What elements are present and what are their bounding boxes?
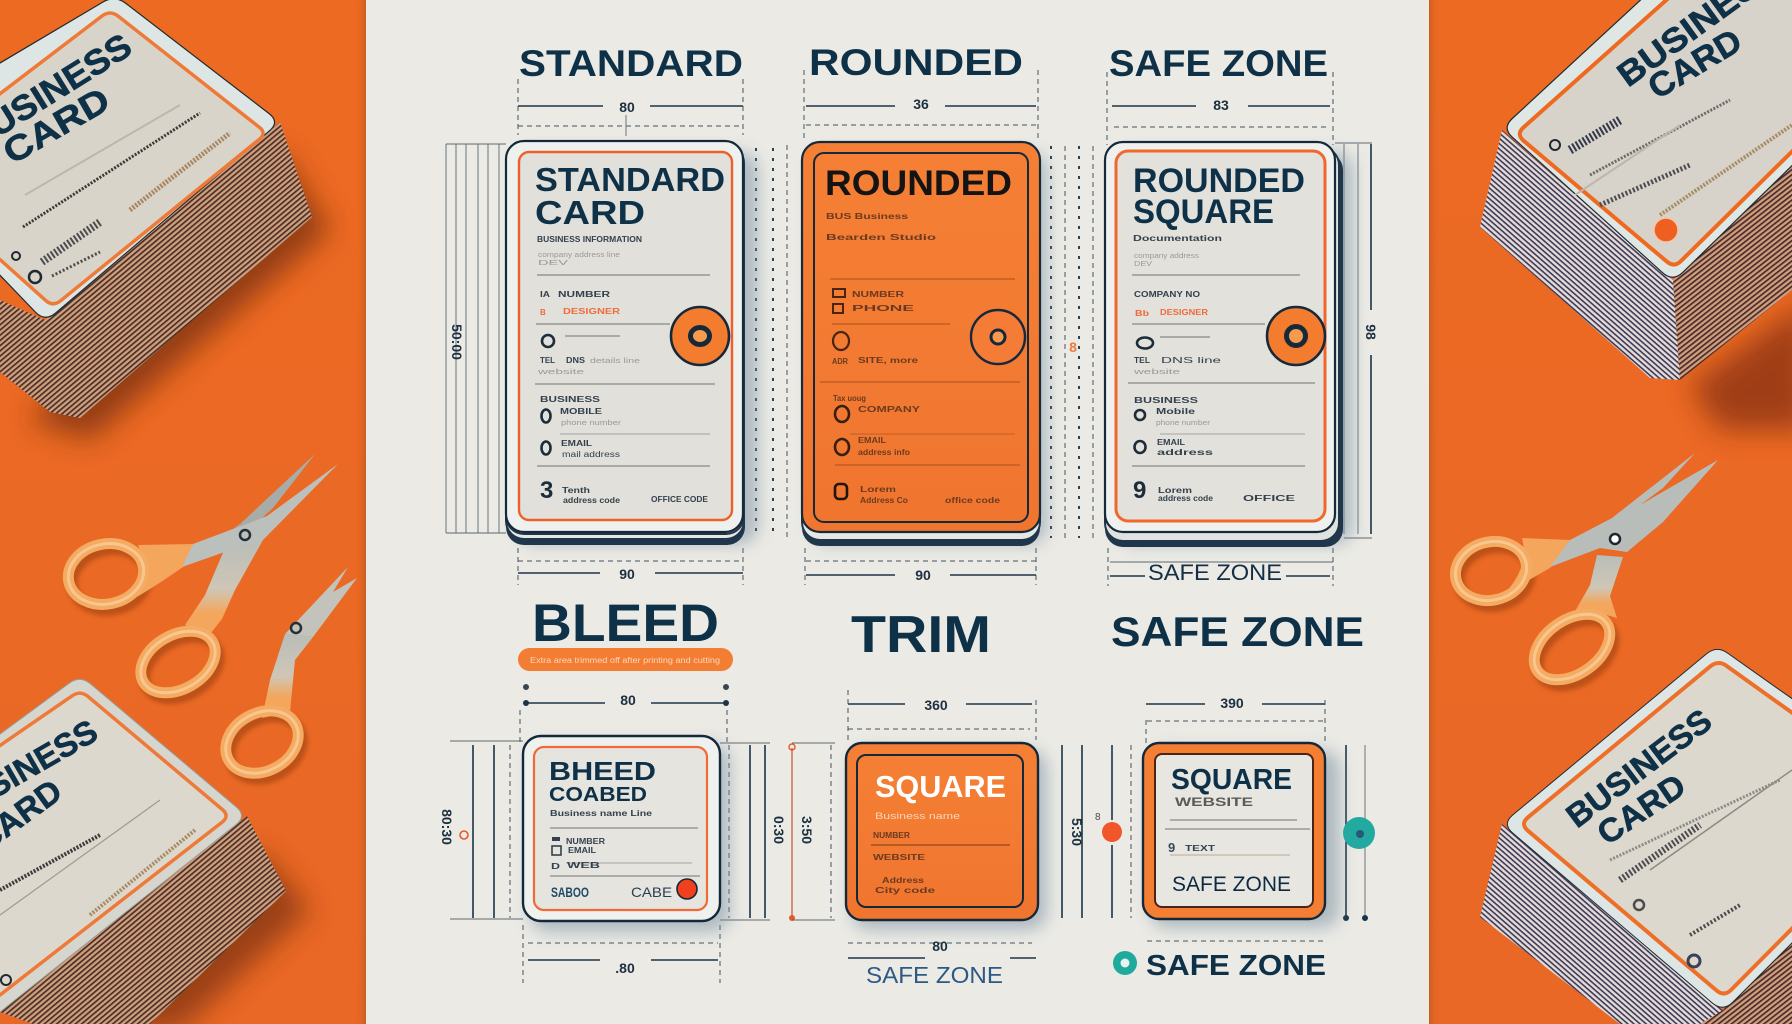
contact rows: DEV bbox=[1134, 261, 1152, 268]
dimensions: bleed card: 80:30 bbox=[439, 809, 455, 845]
contact rows: Lorem bbox=[860, 485, 896, 494]
contact rows: D bbox=[551, 862, 560, 871]
contact rows: EMAIL bbox=[1157, 438, 1185, 447]
contact rows: PHONE bbox=[852, 304, 915, 313]
contact rows: DNS bbox=[566, 356, 586, 365]
heading: trim: TRIM bbox=[851, 606, 991, 664]
dimensions: safe zone card: 83 bbox=[1213, 97, 1229, 113]
contact rows: Mobile bbox=[1156, 407, 1196, 416]
legend: safe zone: SAFE ZONE bbox=[1146, 950, 1326, 982]
card: rounded square bbox=[1105, 142, 1353, 547]
right decoration: business card stack top: CARD bbox=[1642, 22, 1749, 107]
contact rows: DNS line bbox=[1161, 356, 1222, 365]
contact rows: company address line bbox=[538, 252, 620, 259]
dimensions: standard card: 90 bbox=[619, 566, 635, 582]
panel: guide sheet bbox=[365, 0, 1430, 1024]
card title: STANDARD bbox=[535, 161, 725, 198]
contact rows bbox=[550, 809, 700, 900]
contact rows: phone number bbox=[561, 420, 622, 427]
icon: orange dot bbox=[1102, 822, 1122, 842]
bottom label: SAFE ZONE bbox=[1148, 560, 1282, 585]
contact rows: address info bbox=[858, 448, 910, 457]
icon: target circle bbox=[971, 310, 1025, 364]
card: bleed: COABED bbox=[549, 784, 647, 806]
icon: red dot bbox=[677, 879, 697, 899]
contact rows: phone number bbox=[1156, 420, 1211, 427]
left decoration: business card stack top bbox=[0, 0, 330, 440]
contact rows: address code bbox=[1158, 494, 1214, 503]
icon: orange target circle bbox=[671, 307, 729, 365]
contact rows: TEL bbox=[1134, 356, 1150, 365]
heading: safe zone top: SAFE ZONE bbox=[1109, 43, 1328, 84]
contact rows: EMAIL bbox=[568, 846, 596, 855]
contact rows bbox=[1128, 234, 1315, 504]
dimensions: square safe zone card bbox=[1146, 695, 1368, 941]
heading: rounded: ROUNDED bbox=[809, 42, 1023, 83]
contact rows: details line bbox=[590, 358, 640, 365]
contact rows: ADR bbox=[832, 357, 848, 366]
dimensions: rounded card: 36 bbox=[913, 96, 929, 112]
card: rounded bbox=[802, 142, 1047, 546]
contact rows: SITE, more bbox=[858, 356, 919, 365]
dimensions: standard card: 80 bbox=[619, 99, 635, 115]
contact rows: BUSINESS bbox=[540, 395, 601, 404]
heading: standard: STANDARD bbox=[519, 43, 743, 84]
right decoration: business card stack bottom: CARD bbox=[1590, 766, 1692, 852]
contact rows: NUMBER bbox=[566, 837, 605, 846]
contact rows bbox=[1165, 795, 1310, 855]
contact rows: BUSINESS INFORMATION bbox=[537, 235, 642, 244]
contact rows: Address bbox=[882, 876, 925, 885]
contact rows: SABOO bbox=[551, 884, 589, 900]
contact rows: IA bbox=[540, 290, 550, 299]
icon: orange target circle bbox=[1267, 307, 1325, 365]
contact rows: address code bbox=[563, 496, 621, 505]
icon: large scissors left bbox=[63, 454, 338, 711]
dimensions: rounded card: 8 bbox=[1069, 339, 1077, 355]
contact rows bbox=[535, 235, 715, 505]
contact rows: 3 bbox=[540, 477, 553, 504]
contact rows: BUSINESS bbox=[1134, 396, 1199, 405]
contact rows: TEXT bbox=[1185, 844, 1215, 853]
contact rows: DEV bbox=[538, 260, 569, 267]
contact rows: COMPANY NO bbox=[1134, 290, 1200, 299]
dimensions: square safe zone card: 390 bbox=[1220, 695, 1244, 711]
dimensions: bleed card: 80 bbox=[620, 692, 636, 708]
contact rows: TEL bbox=[540, 356, 555, 365]
contact rows: BUS Business bbox=[826, 212, 909, 221]
contact rows: OFFICE CODE bbox=[651, 495, 709, 504]
card: rounded square: SQUARE bbox=[1133, 193, 1274, 231]
contact rows: 9 bbox=[1133, 477, 1146, 504]
heading: safe zone bottom: SAFE ZONE bbox=[1111, 608, 1364, 655]
dimensions: safe zone card bbox=[1079, 72, 1379, 586]
card: standard: CARD bbox=[535, 194, 645, 231]
card: square orange bbox=[846, 743, 1047, 930]
contact rows: NUMBER bbox=[873, 831, 910, 840]
contact rows: CABE bbox=[631, 884, 672, 900]
card: square safe zone bbox=[1143, 743, 1340, 928]
dimensions: bleed card bbox=[439, 684, 835, 983]
card: bleed bbox=[523, 736, 730, 932]
orange pill bbox=[518, 648, 733, 671]
contact rows: 9 bbox=[1168, 840, 1175, 855]
contact rows: Documentation bbox=[1133, 234, 1222, 243]
contact rows: website bbox=[1132, 369, 1180, 376]
contact rows: MOBILE bbox=[560, 407, 603, 416]
card title: ROUNDED bbox=[825, 164, 1012, 203]
contact rows: NUMBER bbox=[852, 290, 904, 299]
contact rows: Tenth bbox=[562, 486, 590, 495]
card title: SQUARE bbox=[1171, 764, 1292, 796]
contact rows: WEB bbox=[567, 861, 600, 870]
contact rows: website bbox=[536, 369, 584, 376]
dimensions: trim card: 8 bbox=[1095, 812, 1101, 823]
dimensions: bleed card: 0:30 bbox=[771, 816, 787, 844]
contact rows: Address Co bbox=[860, 496, 908, 505]
icon: teal dot bbox=[1343, 817, 1375, 849]
dimensions: standard card: 50:00 bbox=[449, 324, 465, 360]
dimensions: bleed card: 3:50 bbox=[799, 816, 815, 844]
contact rows: Lorem bbox=[1158, 486, 1192, 495]
card title: BHEED bbox=[549, 756, 656, 786]
contact rows: WEBSITE bbox=[873, 853, 926, 862]
dimensions: trim card bbox=[848, 690, 1131, 988]
dimensions: rounded card: 90 bbox=[915, 567, 931, 583]
contact rows: Bb bbox=[1135, 309, 1149, 318]
contact rows: mail address bbox=[562, 450, 620, 459]
dimensions: safe zone card: 98 bbox=[1363, 324, 1379, 340]
dimensions: trim card: 5:30 bbox=[1069, 818, 1085, 846]
contact rows: EMAIL bbox=[858, 436, 886, 445]
contact rows: DESIGNER bbox=[563, 307, 620, 316]
heading: bleed: BLEED bbox=[532, 594, 719, 653]
contact rows: Business name Line bbox=[550, 809, 653, 818]
icon: small scissors left bbox=[215, 567, 357, 791]
dimensions: rounded card bbox=[804, 70, 1077, 585]
card: standard bbox=[506, 141, 758, 545]
contact rows: office code bbox=[945, 496, 1001, 505]
card title: SQUARE bbox=[875, 769, 1006, 804]
contact rows: B bbox=[540, 308, 546, 317]
contact rows: EMAIL bbox=[561, 439, 592, 448]
left decoration: business card stack bottom bbox=[0, 679, 310, 1024]
contact rows: COMPANY bbox=[858, 405, 921, 414]
contact rows: Business name bbox=[875, 811, 960, 821]
icon: scissors right bbox=[1449, 453, 1718, 699]
contact rows: OFFICE bbox=[1243, 494, 1296, 503]
contact rows bbox=[871, 811, 1010, 895]
card safe zone label: SAFE ZONE bbox=[1172, 873, 1291, 896]
contact rows: Tax uoug bbox=[833, 394, 866, 403]
contact rows bbox=[820, 212, 1020, 505]
contact rows: NUMBER bbox=[558, 290, 610, 299]
contact rows: address bbox=[1157, 448, 1214, 457]
contact rows: DESIGNER bbox=[1160, 308, 1208, 317]
right decoration: business card stack top bbox=[1480, 0, 1792, 430]
dimensions: standard card bbox=[446, 79, 787, 585]
contact rows: WEBSITE bbox=[1175, 795, 1253, 809]
card name text: BUSINESS bbox=[1559, 702, 1719, 835]
contact rows: company address bbox=[1134, 253, 1200, 260]
dimensions: trim card: 360 bbox=[924, 697, 948, 713]
orange pill: Extra area trimmed off after printing and cutting bbox=[530, 656, 720, 665]
card title: ROUNDED bbox=[1133, 162, 1305, 200]
dimensions: bleed card: .80 bbox=[615, 960, 635, 976]
contact rows: City code bbox=[875, 886, 936, 895]
right decoration: business card stack bottom bbox=[1480, 649, 1792, 1024]
trim bottom label: SAFE ZONE bbox=[866, 962, 1003, 988]
contact rows: Bearden Studio bbox=[826, 233, 936, 242]
icon: orange dot bbox=[1654, 218, 1678, 242]
dimensions: trim card: 80 bbox=[932, 938, 948, 954]
